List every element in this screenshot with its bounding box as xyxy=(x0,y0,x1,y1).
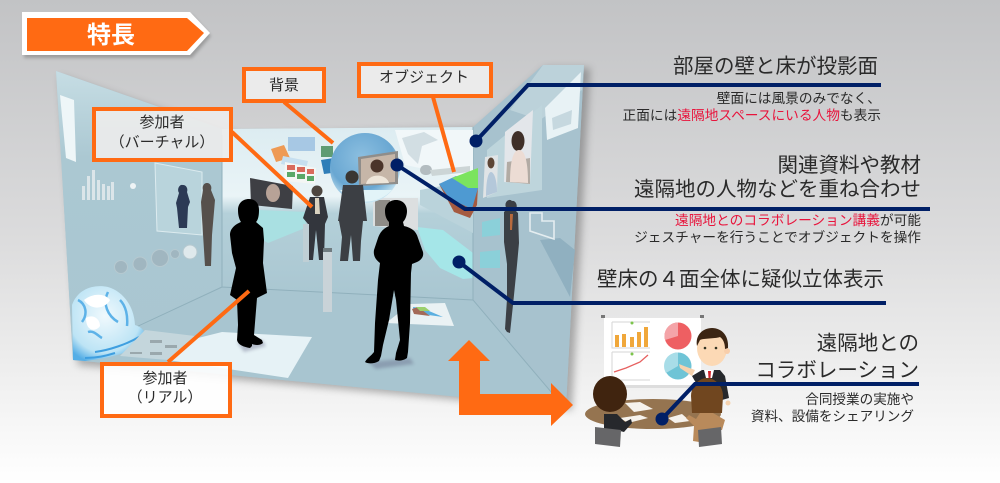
arrow: two-way orange arrow xyxy=(448,340,573,426)
table xyxy=(585,399,721,429)
seated person left xyxy=(593,376,632,447)
heading badge: 特長: 特長 xyxy=(87,22,135,49)
callout line: pseudo 3D xyxy=(452,256,886,303)
text block: walls and floor: 壁面には風景のみでなく、 xyxy=(717,91,881,106)
text block: walls and floor: 部屋の壁と床が投影面 xyxy=(673,55,878,78)
text block: overlay materials: 遠隔地とのコラボレーション講義が可能 xyxy=(675,212,921,228)
label: virtual participant xyxy=(94,109,231,160)
virtual participant: presenter xyxy=(303,186,328,260)
illustration: remote collaboration meeting xyxy=(585,315,730,447)
label: object xyxy=(359,64,491,96)
right wall photos xyxy=(480,105,554,333)
text block: collaboration: 合同授業の実施や xyxy=(805,392,914,407)
label: virtual participant: （バーチャル） xyxy=(110,134,214,151)
panel: projection room xyxy=(56,65,590,410)
left wall round icons xyxy=(114,245,197,274)
text block: overlay materials: 遠隔地の人物などを重ね合わせ xyxy=(634,178,921,201)
left wall chart and screen xyxy=(82,163,293,266)
floor projection xyxy=(120,303,454,378)
globe with video xyxy=(330,133,400,203)
callout line: overlay xyxy=(390,158,930,209)
pillar xyxy=(303,224,332,312)
room walls and floor xyxy=(56,65,584,407)
seated person right xyxy=(686,378,725,447)
text block: overlay materials: 関連資料や教材 xyxy=(778,154,921,177)
label: background: 背景 xyxy=(269,77,299,94)
label: virtual participant: 参加者 xyxy=(139,114,185,131)
text block: overlay materials xyxy=(634,154,921,245)
label: object: オブジェクト xyxy=(379,68,469,86)
text block: overlay materials: ジェスチャーを行うことでオブジェクトを操作 xyxy=(634,229,921,245)
callout line: walls and floor xyxy=(470,85,881,148)
label: background xyxy=(244,69,324,101)
callout lines and dots xyxy=(390,85,930,426)
label: real participant xyxy=(102,364,230,416)
text block: collaboration: 遠隔地との xyxy=(817,332,919,355)
text block: collaboration: コラボレーション xyxy=(755,359,919,382)
text block: pseudo 3D: 壁床の４面全体に疑似立体表示 xyxy=(597,268,884,291)
label: real participant: 参加者 xyxy=(142,370,188,387)
text block: collaboration xyxy=(751,332,919,424)
heading badge: 特長 xyxy=(22,12,211,58)
whiteboard xyxy=(601,315,704,388)
presenter xyxy=(679,328,730,406)
callout line: collaboration xyxy=(656,384,919,426)
text block: walls and floor: 正面には遠隔地スペースにいる人物も表示 xyxy=(623,108,881,123)
back wall panels: colorful images xyxy=(271,137,355,184)
silhouette: real participant man xyxy=(365,200,423,369)
silhouette: real participant woman xyxy=(230,199,267,352)
globe on floor corner xyxy=(72,286,145,361)
label: real participant: （リアル） xyxy=(128,389,202,406)
terrain object xyxy=(439,168,478,218)
virtual participant: standing back xyxy=(338,170,367,261)
text block: walls and floor xyxy=(623,55,881,123)
leader lines from labels xyxy=(168,97,454,362)
text block: collaboration: 資料、設備をシェアリング xyxy=(751,409,914,424)
back wall map xyxy=(373,130,473,233)
